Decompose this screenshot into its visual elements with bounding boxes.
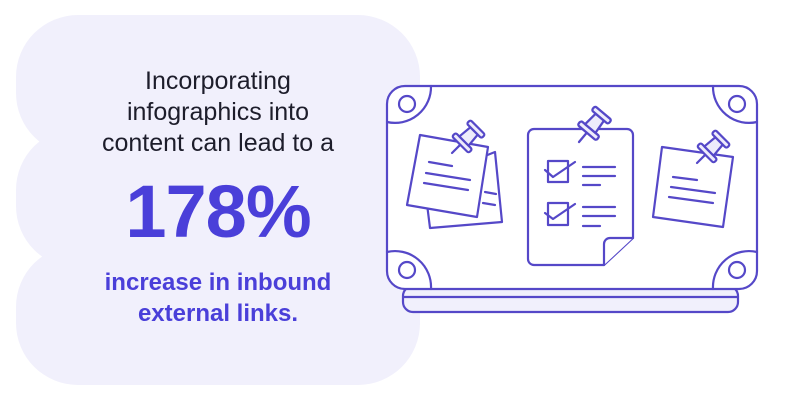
intro text: infographics into [127, 98, 309, 126]
stat description: external links. [138, 300, 298, 327]
intro text: content can lead to a [102, 129, 334, 157]
pin [570, 105, 613, 150]
shelf [403, 286, 738, 312]
right note [653, 129, 733, 227]
big stat: 178% [125, 170, 311, 253]
pin [689, 129, 731, 171]
stat description: increase in inbound [105, 269, 331, 296]
center checklist [528, 105, 633, 265]
stat description [105, 269, 331, 327]
intro text: Incorporating [145, 67, 291, 95]
pin [444, 119, 486, 161]
intro text [102, 67, 334, 157]
left notes [407, 119, 502, 228]
board [387, 86, 757, 289]
